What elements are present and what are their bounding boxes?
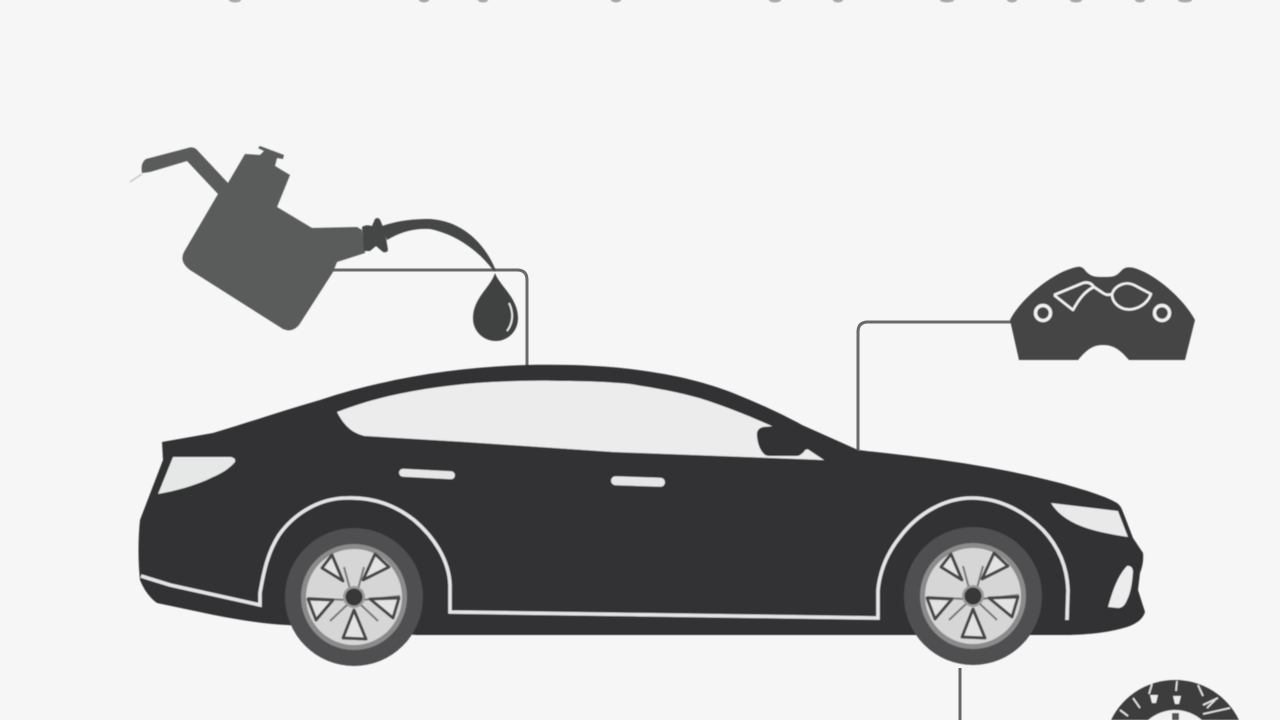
connector: brake caliper to car (858, 322, 1012, 450)
gauge disc (1111, 680, 1239, 720)
door mirror (757, 426, 818, 456)
car body silhouette (138, 365, 1145, 635)
oil can body (142, 146, 365, 330)
caliper body (1010, 267, 1195, 360)
tail light (158, 457, 235, 494)
caliper inlay (1054, 282, 1151, 310)
gauge ticks (1120, 681, 1230, 716)
connector: front wheel to gauge (958, 668, 962, 720)
icon: brake caliper (1010, 267, 1195, 360)
mirror window corner (790, 451, 824, 460)
spout drip (130, 174, 142, 182)
front door handle (611, 476, 665, 487)
gauge hub (1148, 710, 1202, 720)
fog light (1108, 566, 1133, 608)
rear wheel (285, 528, 423, 666)
body trim stripe (141, 498, 1068, 620)
oil drop (473, 273, 518, 341)
icon: oil can (130, 146, 518, 341)
hose collar (362, 218, 388, 252)
gauge hub centre (1172, 713, 1179, 720)
drop highlight (507, 303, 512, 331)
headlight (1051, 503, 1128, 537)
gauge markers (1150, 695, 1181, 704)
front wheel (904, 527, 1042, 665)
rear door handle (399, 469, 455, 479)
caliper mounting holes (1036, 306, 1050, 320)
icon: cropped gauge dial (1111, 680, 1239, 720)
car (138, 365, 1145, 666)
connector: oil can to car roof (333, 270, 527, 366)
oil hose (382, 219, 496, 271)
cropped heading remnants (229, 0, 1192, 2)
side window (337, 381, 824, 460)
